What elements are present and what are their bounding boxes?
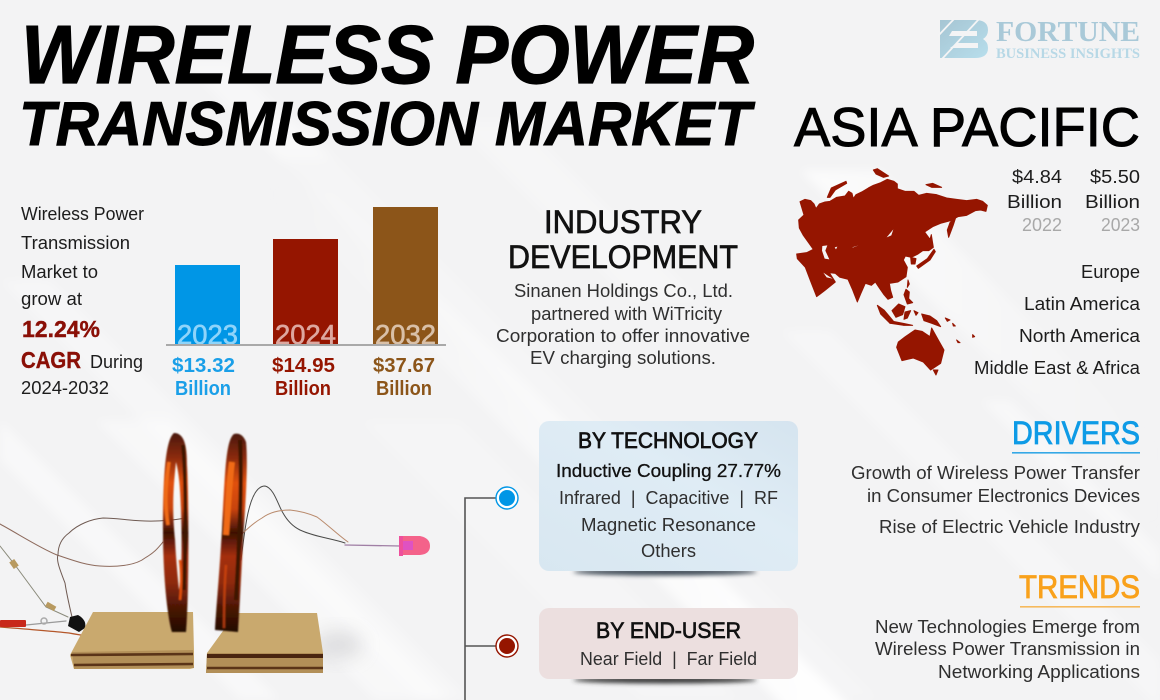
Asia Pacific values: $5.50 [1090,167,1140,187]
drivers text [851,463,1140,537]
drivers text: Rise of Electric Vehicle Industry [879,517,1140,537]
red lead [0,620,26,627]
Asia Pacific values: Billion [1007,192,1062,212]
Asia Pacific values: $4.84 [1012,167,1062,187]
panel: by end-user [539,608,798,684]
other regions list [974,262,1141,378]
bar chart [166,207,446,400]
bar: 2024: $14.95 [272,355,335,377]
heading: Asia Pacific: ASIA PACIFIC [794,96,1140,158]
bar: 2023 [172,265,240,400]
CAGR text block: Market to [21,262,98,282]
wires [0,486,400,638]
industry development text: partnered with WiTricity [531,304,722,324]
heading: Industry Development: INDUSTRY [544,204,702,240]
panel: by end-user: BY END-USER [596,618,741,643]
trends text: Networking Applications [938,662,1140,682]
left cardboard base [70,612,194,669]
industry development text: Corporation to offer innovative [496,326,750,346]
title: WIRELESS POWER [21,8,754,101]
title: TRANSMISSION MARKET [19,90,756,159]
bar: 2023: Billion [175,378,231,400]
panel: by technology: Inductive Coupling 27.77% [556,461,781,481]
industry development text: EV charging solutions. [530,348,716,368]
right cardboard base [206,613,323,673]
marker: end-user [496,635,518,657]
connector tree [465,498,496,700]
CAGR text block: 2024-2032 [21,378,109,398]
Asia Pacific values: Billion [1085,192,1140,212]
logo: Fortune Business Insights [938,17,1140,62]
photo: wireless power coils with LED [0,433,430,673]
bar: 2032: Billion [376,378,432,400]
other regions list: Latin America [1024,294,1141,314]
panel: by technology: BY TECHNOLOGY [578,428,758,453]
bar: 2024 [272,239,338,400]
CAGR text block: grow at [21,289,82,309]
heading: Drivers: DRIVERS [1012,415,1140,451]
panel: by technology [539,421,798,576]
CAGR text block [21,204,144,398]
bar: 2023: $13.32 [172,355,235,377]
trends text [875,617,1140,682]
Asia Pacific values [1007,167,1140,235]
heading: Industry Development [508,204,738,275]
right coil [215,434,247,632]
panel: by technology: Others [641,541,696,561]
drivers text: in Consumer Electronics Devices [867,486,1140,506]
CAGR text block: During [90,352,143,372]
CAGR text block: 12.24% [22,316,100,342]
Asia Pacific values: 2023 [1101,215,1140,235]
heading: Industry Development: DEVELOPMENT [508,239,738,275]
industry development text: Sinanen Holdings Co., Ltd. [514,281,733,301]
bar: 2023: 2023 [177,319,238,350]
CAGR text block: Wireless Power [21,204,144,224]
other regions list: Europe [1081,262,1140,282]
bar: 2032: 2032 [375,319,436,350]
industry development text [496,281,750,368]
title [19,8,756,159]
heading: Trends: TRENDS [1019,569,1140,605]
bar: 2032: $37.67 [373,355,435,377]
Asia Pacific values: 2022 [1022,215,1062,235]
logo: Fortune Business Insights: FORTUNE [996,17,1140,48]
logo: Fortune Business Insights: BUSINESS INSIGHTS [996,46,1140,62]
panel: by technology: Magnetic Resonance [581,515,756,535]
CAGR text block: CAGR [21,347,81,373]
transistor [68,615,85,632]
LED [399,536,430,556]
trends text: Wireless Power Transmission in [875,639,1140,659]
panel: by end-user: Near Field | Far Field [580,649,757,669]
panel: by technology: Infrared | Capacitive | RF [559,488,778,508]
other regions list: North America [1019,326,1141,346]
left coil [163,433,188,632]
marker: technology [496,487,518,509]
CAGR text block: Transmission [21,233,130,253]
map: Asia Pacific [797,169,987,375]
bar: 2032 [373,207,438,400]
other regions list: Middle East & Africa [974,358,1141,378]
trends text: New Technologies Emerge from [875,617,1140,637]
bar: 2024: 2024 [275,319,336,350]
bar: 2024: Billion [275,378,331,400]
drivers text: Growth of Wireless Power Transfer [851,463,1140,483]
